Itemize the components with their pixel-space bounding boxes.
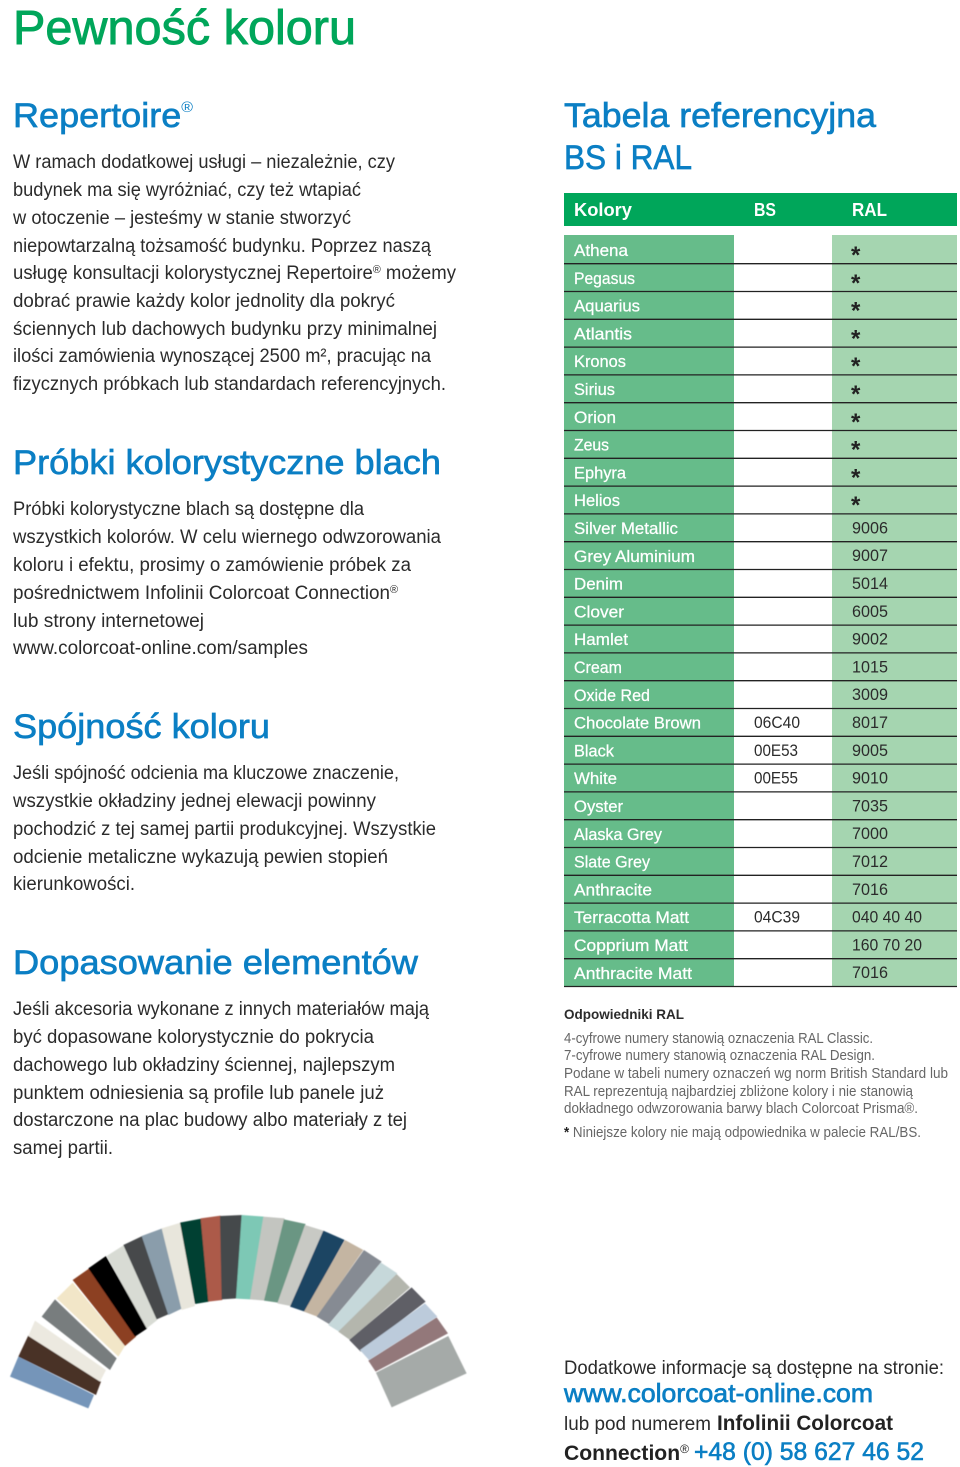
heading: Repertoire: Repertoire [13,97,172,135]
table column: colour names: White [574,770,617,788]
table column: BS values: 00E53 [754,742,798,760]
table column: colour names: Terracotta Matt [574,909,689,927]
notes text: 4-cyfrowe numery stanowią oznaczenia RAL Classic. [564,1031,873,1047]
table column: colour names: Oyster [574,798,624,816]
text block: Repertoire: niepowtarzalną tożsamość budynku. Poprzez naszą [13,236,431,257]
table column: RAL values: * [851,325,861,352]
table column: RAL values: * [851,381,861,408]
text block: Dopasowanie [13,999,429,1159]
text block: Dopasowanie: dostarczone na plac budowy albo materiały z tej [13,1110,407,1131]
hotline name line 1: Infolinii Colorcoat [717,1412,893,1435]
table column: RAL values: * [851,242,861,269]
table header [564,193,957,226]
heading: Tabela referencyjna BS i RAL [564,97,876,177]
table column: colour names: Clover [574,603,625,621]
text block: Dopasowanie: Jeśli akcesoria wykonane z innych materiałów mają [13,999,429,1020]
notes: RAL equivalents [564,1006,948,1141]
table column: RAL values: 3009 [852,686,888,704]
heading: Spójność koloru: Spójność koloru [13,708,270,746]
text block: Próbki: wszystkich kolorów. W celu wiernego odwzorowania [12,527,441,548]
section: Próbki kolorystyczne blach [12,444,441,659]
text block: Próbki: koloru i efektu, prosimy o zamówienie próbek za [13,555,411,576]
table column: colour names: Alaska Grey [574,826,663,844]
hotline name line 2: ® [680,1442,689,1456]
text block: Spójność: kierunkowości. [13,874,135,895]
table column: RAL values: 7012 [852,853,888,871]
table column: BS values: 04C39 [754,909,800,927]
table column: RAL values: 7000 [852,825,888,843]
heading: Dopasowanie elementów: Dopasowanie elementów [13,944,418,982]
table column: RAL values: 9005 [852,742,888,760]
contact block [563,1358,944,1466]
table column: RAL values: 6005 [852,603,888,621]
table: colour reference [564,193,957,986]
table column: colour names: Athena [574,242,629,260]
text block: Repertoire: ® [373,264,381,276]
text block: Repertoire: dobrać prawie każdy kolor jednolity dla pokryć [13,291,395,312]
table column: RAL values: 8017 [852,714,888,732]
table column: BS values: 06C40 [754,714,800,732]
text block: Dopasowanie: dachowego lub okładziny ściennej, najlepszym [13,1055,395,1076]
text block: Próbki: ® [390,584,398,596]
table column: colour names: Grey Aluminium [574,548,695,566]
heading: Próbki kolorystyczne blach: Próbki kolorystyczne blach [13,444,441,482]
table column: colour names: Aquarius [574,298,640,316]
table column: colour names: Slate Grey [574,854,651,872]
section: Repertoire [12,97,456,395]
table column: colour names: Ephyra [574,464,627,482]
hotline label: lub pod numerem [564,1414,711,1435]
text block: Dopasowanie: punktem odniesienia są profile lub panele już [13,1083,384,1104]
heading: Repertoire: ® [181,99,193,116]
phone number: +48 (0) 58 627 46 52 [694,1438,924,1466]
table column: colour names: Anthracite [574,881,652,899]
table column: RAL values: 040 40 40 [852,909,922,927]
table column: RAL values: 160 70 20 [852,936,922,954]
table header: RAL [852,199,887,220]
notes text: RAL reprezentują najbardziej zbliżone kolory i nie stanowią [564,1084,914,1100]
table column: colour names: Cream [574,659,622,677]
table column: RAL values: 7035 [852,797,888,815]
table column: colour names: Pegasus [574,270,635,288]
text block: Spójność: wszystkie okładziny jednej elewacji powinny [12,791,376,812]
text block: Próbki: pośrednictwem Infolinii Colorcoat Connection [13,583,393,604]
notes heading: Odpowiedniki RAL [564,1006,684,1022]
table column: RAL values: 9007 [852,547,888,565]
table column: BS values [754,714,800,927]
page title: Pewność koloru [13,2,356,55]
text block: Repertoire: fizycznych próbkach lub standardach referencyjnych. [13,374,446,395]
table header: Kolory [574,199,633,220]
table column: colour names: Copprium Matt [574,937,688,955]
text block: Repertoire: usługę konsultacji kolorystycznej Repertoire [13,263,382,284]
text block: Spójność [12,763,436,895]
footnote: * Niniejsze kolory nie mają odpowiednika w palecie RAL/BS. [564,1125,921,1141]
hotline name line 2: Connection [564,1442,680,1465]
notes text: dokładnego odwzorowania barwy blach Colorcoat Prisma®. [564,1101,918,1117]
text block: Repertoire: możemy [381,263,456,284]
text block: Repertoire: w otoczenie – jesteśmy w stanie stworzyć [12,208,351,229]
notes text [564,1031,948,1117]
text block: Dopasowanie: być dopasowane kolorystycznie do pokrycia [13,1027,374,1048]
table column: RAL values: 5014 [852,575,888,593]
table column: RAL values: 9010 [852,770,888,788]
table column: colour names [574,242,701,983]
text block: Próbki: lub strony internetowej [13,611,204,632]
text block: Próbki: www.colorcoat-online.com/samples [12,638,308,659]
table column: colour names: Kronos [574,353,626,371]
text block: Próbki [12,499,441,659]
table column: colour names: Silver Metallic [574,520,678,538]
contact intro: Dodatkowe informacje są dostępne na stronie: [564,1358,944,1379]
table column: RAL values: * [851,492,861,519]
table column: colour names: Denim [574,576,623,594]
table column: RAL values: * [851,270,861,297]
table column: RAL values: * [851,437,861,464]
table column: RAL values: 7016 [852,881,888,899]
text block: Próbki: Próbki kolorystyczne blach są dostępne dla [13,499,364,520]
colour swatch fan [10,1215,467,1408]
table column: RAL values: * [851,409,861,436]
table column: RAL values: * [851,353,861,380]
table column: colour names: Chocolate Brown [574,715,701,733]
table header: BS [754,199,776,220]
table column: RAL values: 9002 [852,631,888,649]
text block: Repertoire: W ramach dodatkowej usługi – niezależnie, czy [13,152,395,173]
section: Dopasowanie elementów [13,944,429,1159]
text block: Repertoire: ściennych lub dachowych budynku przy minimalnej [13,319,437,340]
table column: colour names: Orion [574,409,616,427]
text block: Spójność: odcienie metaliczne wykazują pewien stopień [13,847,388,868]
section: Spójność koloru [12,708,436,895]
text block: Repertoire: ilości zamówienia wynoszącej 2500 m², pracując na [13,346,431,367]
text block: Spójność: pochodzić z tej samej partii produkcyjnej. Wszystkie [13,819,436,840]
notes text: 7-cyfrowe numery stanowią oznaczenia RAL Design. [564,1048,875,1064]
table column: RAL values: * [851,464,861,491]
table column: colour names: Sirius [574,381,615,399]
table column: colour names: Anthracite Matt [574,965,692,983]
table column: BS values: 00E55 [754,770,798,788]
text block: Spójność: Jeśli spójność odcienia ma kluczowe znaczenie, [13,763,399,784]
table column: RAL values: 9006 [852,519,888,537]
table column: colour names: Zeus [574,437,609,455]
table column: colour names: Black [574,742,615,760]
table column: colour names: Hamlet [574,631,628,649]
text block: Dopasowanie: samej partii. [13,1138,113,1159]
website link: www.colorcoat-online.com [563,1378,873,1408]
table column: RAL values: 7016 [852,964,888,982]
table column: colour names: Helios [574,492,620,510]
table column: RAL values: 1015 [852,658,888,676]
heading: Tabela referencyjna BS i RAL: Tabela referencyjna [564,97,876,135]
table column: colour names: Oxide Red [574,687,650,705]
heading: Tabela referencyjna BS i RAL: BS i RAL [564,139,692,177]
table column: colour names: Atlantis [574,325,632,343]
table column: RAL values: * [851,298,861,325]
text block: Repertoire [12,152,456,395]
text block: Repertoire: budynek ma się wyróżniać, czy też wtapiać [13,180,361,201]
table column: RAL values [851,242,922,982]
